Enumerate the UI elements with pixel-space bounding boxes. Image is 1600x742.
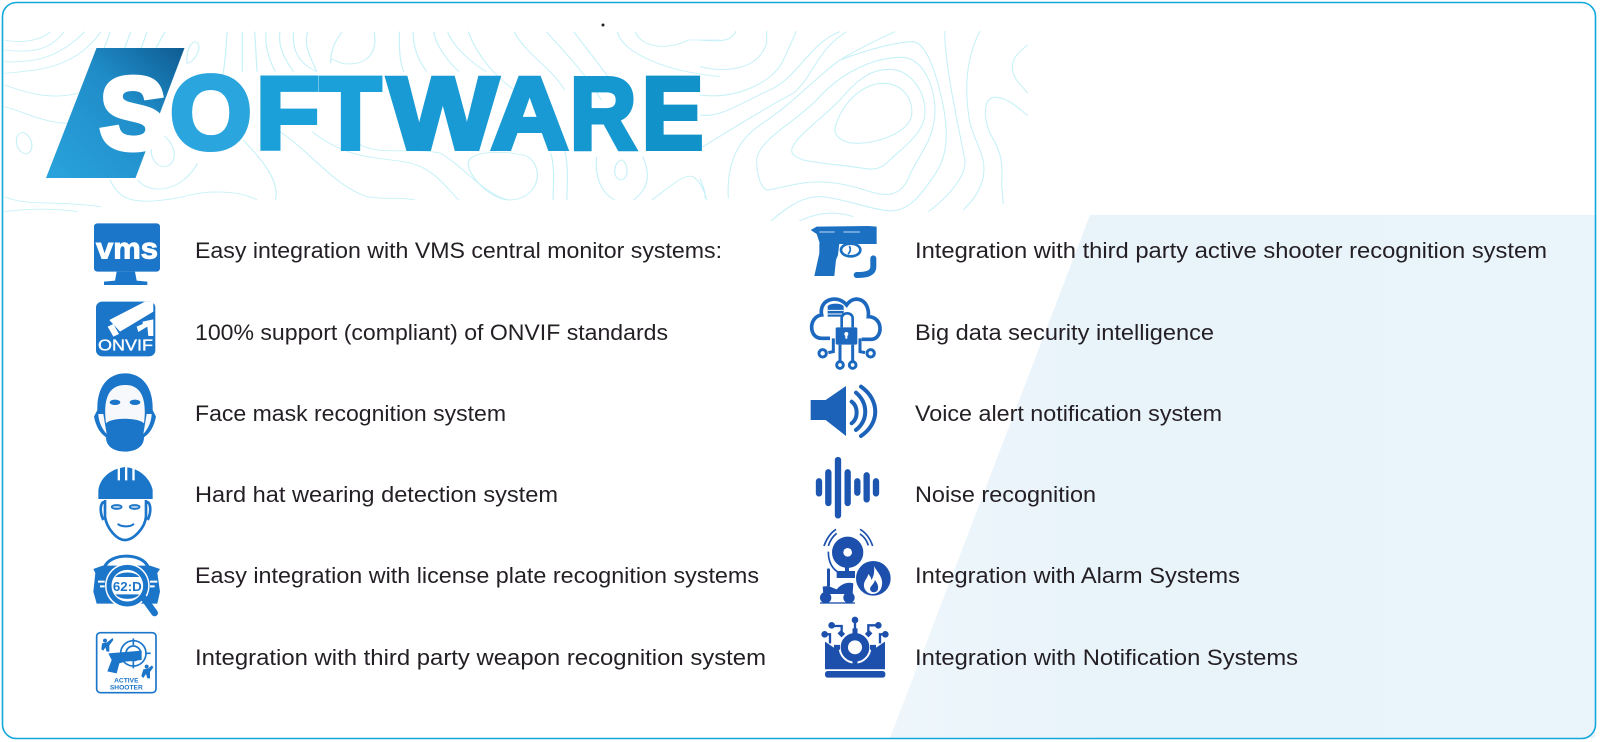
word letters: E	[642, 56, 703, 171]
left column list	[93, 223, 766, 693]
text: Integration with third party weapon recognition system	[195, 645, 766, 670]
row: noise	[819, 460, 1096, 515]
row: notification	[821, 617, 1298, 678]
icon: face mask	[94, 373, 156, 452]
icon: onvif camera: ONVIF	[98, 338, 153, 355]
text: 100% support (compliant) of ONVIF standards	[195, 320, 668, 345]
icon: car and magnifier	[93, 556, 160, 613]
background: topographic contour lines	[5, 31, 1028, 223]
word letters: O	[170, 55, 252, 171]
text: Big data security intelligence	[915, 320, 1214, 345]
icon: car and magnifier: 62:D	[113, 579, 142, 594]
icon: speaker	[811, 386, 875, 436]
word letters: W	[388, 57, 499, 171]
word letters: T	[320, 58, 381, 171]
text: Integration with third party active shooter recognition system	[915, 238, 1547, 263]
icon: alarm bell and fire	[820, 529, 891, 604]
icon: active shooter: SHOOTER	[110, 684, 143, 691]
panel: light blue background wedge	[890, 215, 1595, 738]
text: Integration with Alarm Systems	[915, 563, 1240, 588]
row: big data	[812, 299, 1214, 368]
text: Integration with Notification Systems	[915, 645, 1298, 670]
title: SOFTWARE	[46, 48, 703, 178]
icon: handgun	[811, 226, 877, 276]
text: Face mask recognition system	[195, 401, 506, 426]
icon: onvif camera	[96, 302, 155, 356]
text: Easy integration with license plate recognition systems	[195, 563, 759, 588]
word letters: A	[491, 57, 568, 171]
row: VMS	[94, 223, 722, 285]
word letters	[170, 55, 703, 171]
icon: active shooter: ACTIVE	[114, 678, 139, 685]
text: Easy integration with VMS central monitor systems:	[195, 238, 722, 263]
row: weapon recognition	[97, 633, 766, 693]
icon: vms monitor	[94, 223, 160, 285]
text: Noise recognition	[915, 482, 1096, 507]
text: Hard hat wearing detection system	[195, 482, 558, 507]
speck	[602, 24, 604, 26]
icon: gear monitor circuit	[821, 617, 889, 678]
icon: hard hat	[98, 466, 153, 540]
row: ONVIF	[96, 302, 668, 356]
right column list	[811, 226, 1547, 678]
row: face mask	[94, 373, 506, 452]
icon: cloud lock	[812, 299, 880, 368]
icon: vms monitor: vms	[96, 233, 158, 266]
row: alarm	[820, 529, 1240, 604]
icon: active shooter	[97, 633, 156, 693]
word letters: R	[570, 56, 636, 171]
icon: sound wave	[819, 460, 876, 515]
S slab	[46, 48, 184, 178]
row: active shooter recognition	[811, 226, 1547, 276]
row: hard hat	[98, 466, 558, 540]
S letter: S	[100, 58, 166, 171]
text: Voice alert notification system	[915, 401, 1222, 426]
word letters: F	[256, 56, 320, 170]
row: voice alert	[811, 386, 1222, 436]
row: license plate	[93, 556, 759, 613]
